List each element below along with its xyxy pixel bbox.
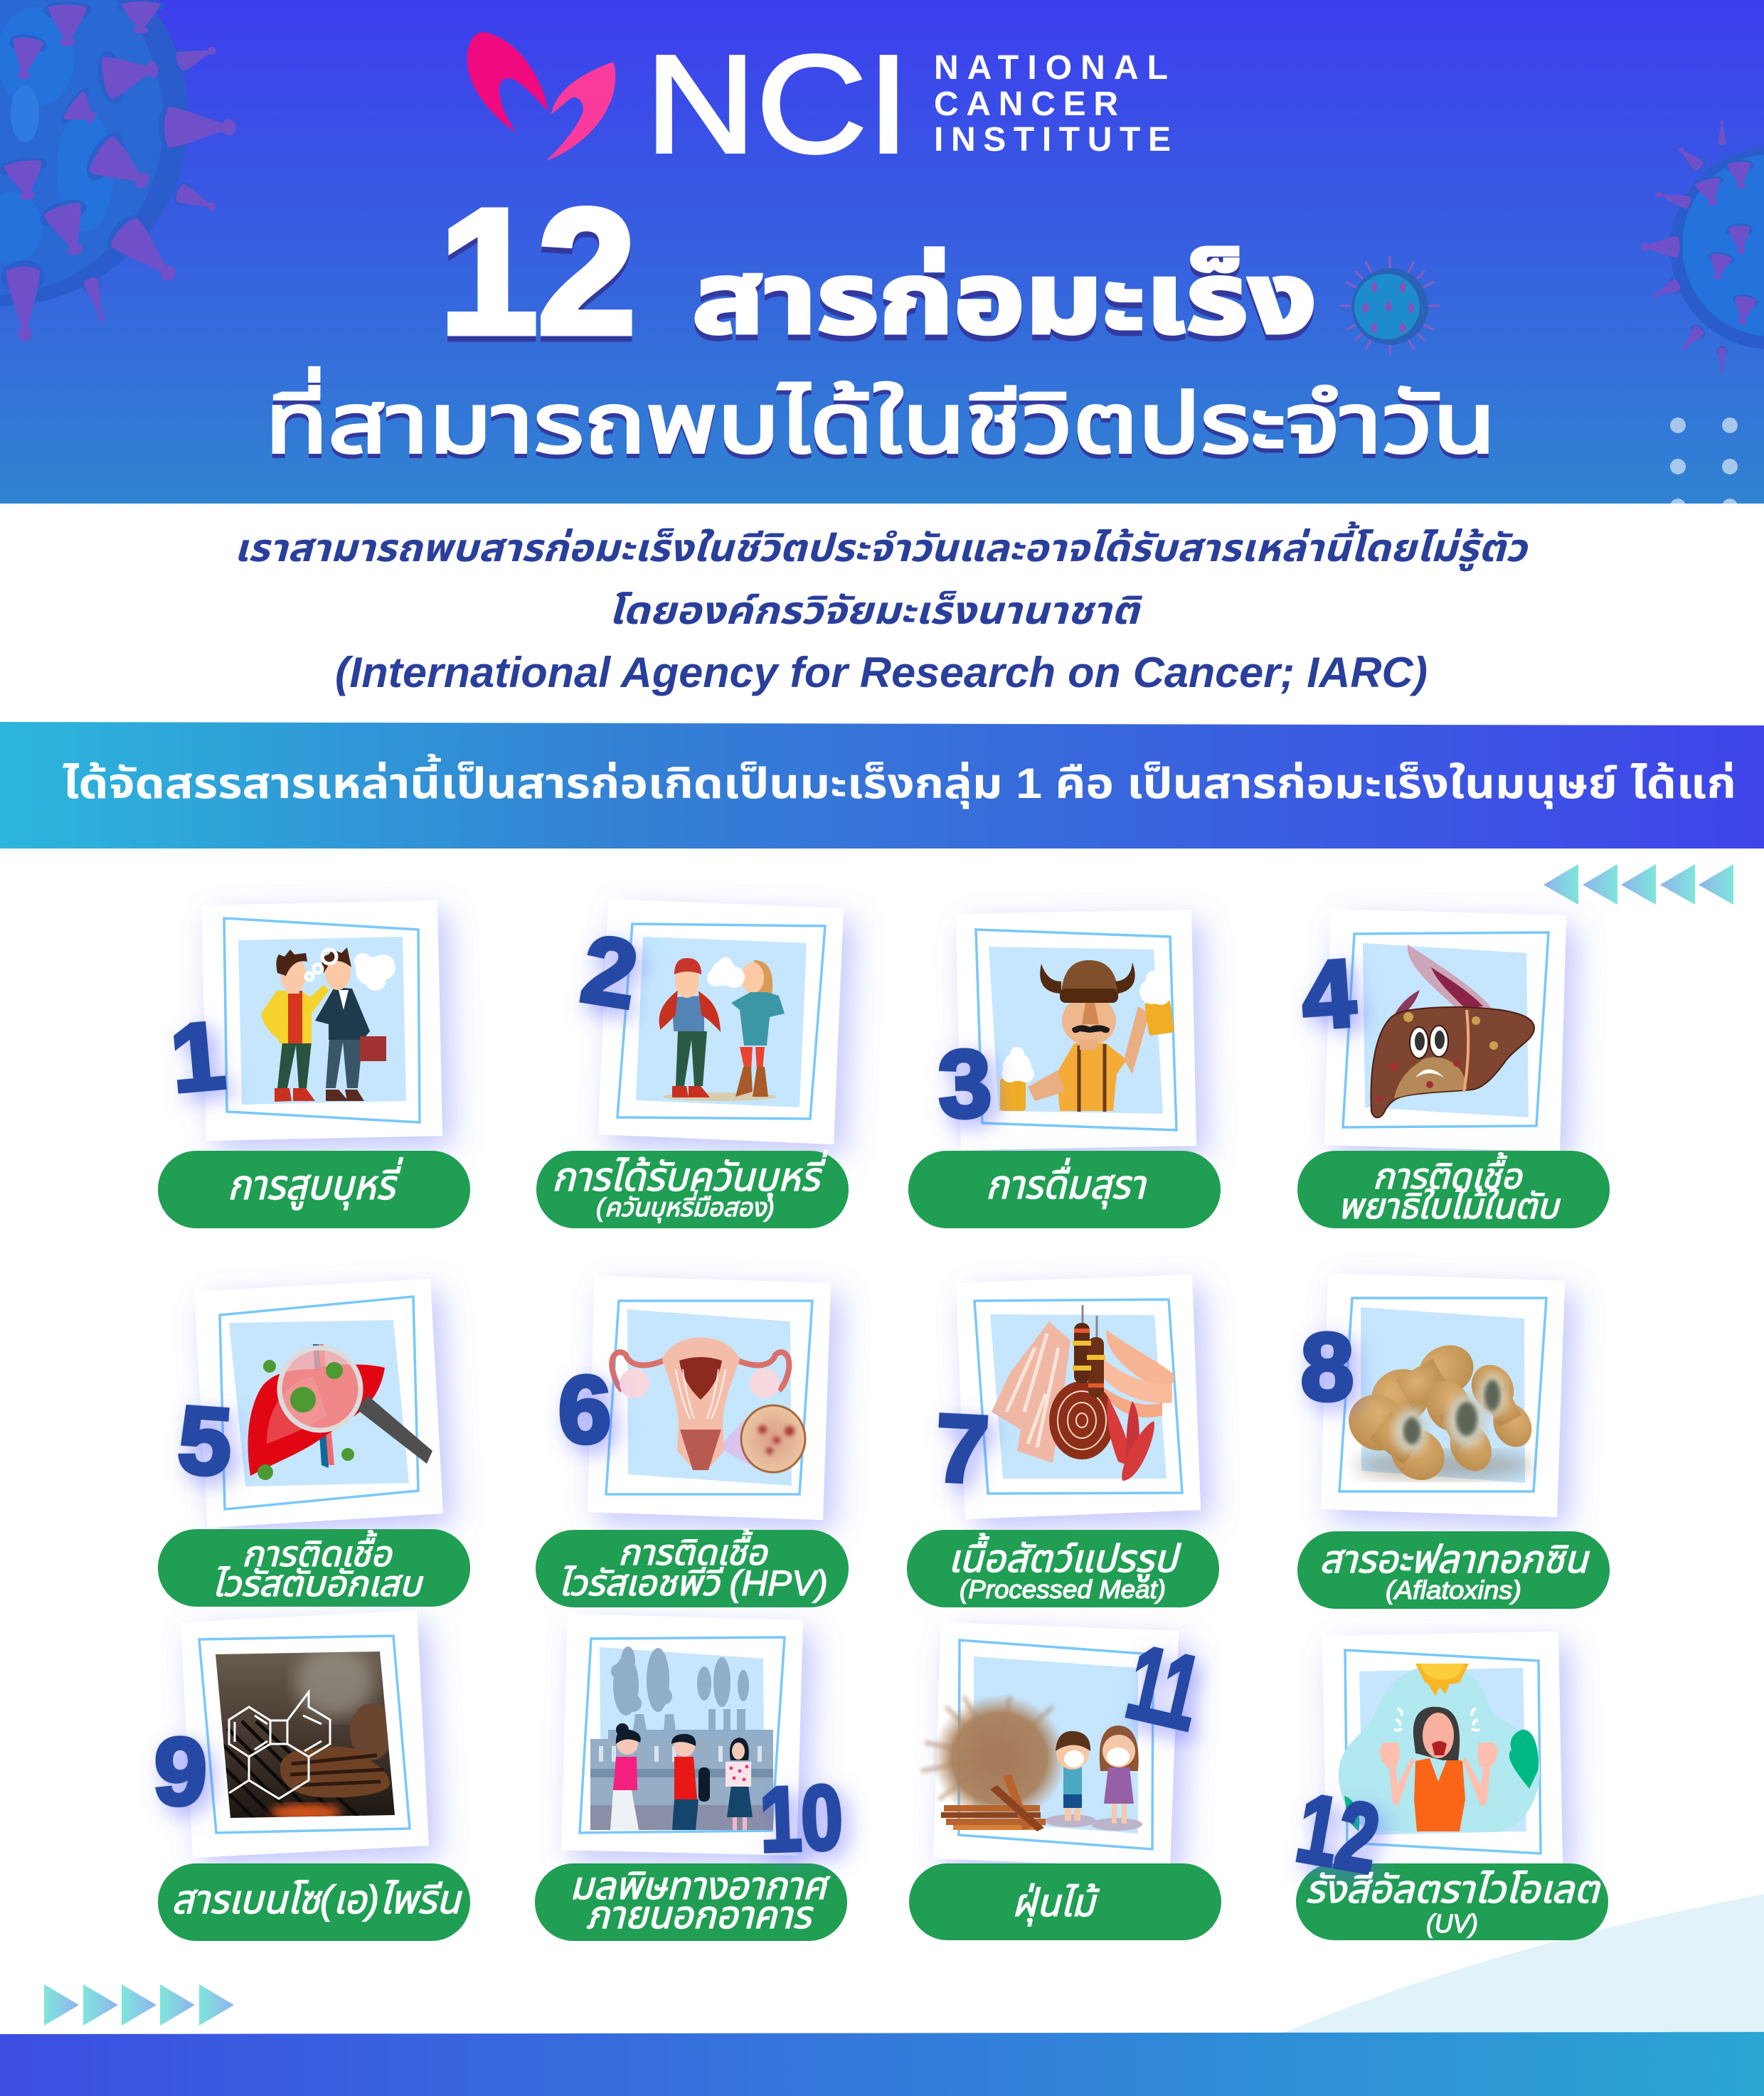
icon: wood dust and children with masks xyxy=(921,1694,1142,1831)
number 10: 10 xyxy=(758,1767,844,1871)
pill label 7: (Processed Meat) xyxy=(960,1575,1166,1604)
pill label 1: การสูบบุหรี่ xyxy=(228,1157,403,1211)
panel: item 4 liver fluke xyxy=(1297,909,1610,1228)
pill label 2: การได้รับควันบุหรี่ xyxy=(552,1150,828,1201)
pill label 12: (UV) xyxy=(1426,1909,1478,1938)
icon: left-pointing arrows xyxy=(1544,864,1733,905)
title: subtitle line: ที่สามารถพบได้ในชีวิตประจำวัน xyxy=(265,371,1496,475)
panel: item 9 benzo(a)pyrene xyxy=(152,1610,470,1941)
panel: item 5 hepatitis xyxy=(158,1279,470,1607)
pill label 4: พยาธิใบไม้ในตับ xyxy=(1338,1186,1561,1226)
bottom wedge xyxy=(1284,1894,1764,2033)
pill label 6: ไวรัสเอชพีวี (HPV) xyxy=(558,1563,828,1603)
logo text: National Cancer Institute: INSTITUTE xyxy=(934,121,1171,159)
pill label 4: การติดเชื้อ xyxy=(1373,1152,1523,1196)
number 12: 12 xyxy=(1290,1773,1387,1893)
number 8: 8 xyxy=(1301,1314,1354,1420)
card photo 1 xyxy=(202,900,442,1141)
icon: right-pointing arrows xyxy=(44,1984,234,2026)
logo text: National Cancer Institute xyxy=(934,49,1171,159)
pill label 10 xyxy=(535,1863,847,1941)
pill label 8: (Aflatoxins) xyxy=(1386,1575,1521,1605)
card photo 5 xyxy=(194,1279,443,1528)
number 2: 2 xyxy=(575,916,644,1028)
icon: butterfly logo xyxy=(467,32,615,161)
pill label 10: มลพิษทางอากาศ xyxy=(570,1865,830,1908)
icon: viking man with beer xyxy=(1000,960,1174,1112)
pill label 5: การติดเชื้อ xyxy=(242,1530,393,1574)
icon: two men smoking xyxy=(261,947,395,1102)
number 3: 3 xyxy=(937,1031,993,1138)
title: 12 สารก่อมะเร็ง xyxy=(440,172,1317,376)
panel: item 10 air pollution xyxy=(535,1614,847,1941)
banner text: ได้จัดสรรสารเหล่านี้เป็นสารก่อเกิดเป็นมะเร็งกลุ่ม 1 คือ เป็นสารก่อมะเร็งในมนุษย์ ได้แก่ xyxy=(63,753,1736,809)
bottom band xyxy=(0,2032,1764,2096)
pill label 4 xyxy=(1297,1151,1610,1228)
title: subtitle line: ที่สามารถพบได้ในชีวิตประจำวัน xyxy=(265,367,1496,471)
logo text: National Cancer Institute: CANCER xyxy=(934,85,1118,123)
icon: woman with sunburn xyxy=(1339,1664,1540,1831)
intro text block: โดยองค์กรวิจัยมะเร็งนานาชาติ xyxy=(608,590,1143,632)
card photo 2 xyxy=(598,899,844,1144)
intro text block: เราสามารถพบสารก่อมะเร็งในชีวิตประจำวันและอาจได้รับสารเหล่านี้โดยไม่รู้ตัว xyxy=(234,521,1529,572)
title: 12 สารก่อมะเร็ง: สารก่อมะเร็ง xyxy=(692,248,1317,360)
title: 12 สารก่อมะเร็ง: 12 xyxy=(440,172,636,371)
icon: small virus xyxy=(1340,256,1440,356)
icon: people in polluted city xyxy=(590,1647,773,1830)
panel: item 8 aflatoxins xyxy=(1297,1273,1610,1609)
panel: item 7 processed meat xyxy=(907,1275,1219,1607)
number 6: 6 xyxy=(558,1357,611,1463)
pill label 6 xyxy=(536,1528,849,1607)
number 4: 4 xyxy=(1298,940,1359,1050)
card photo 7 xyxy=(956,1275,1201,1519)
logo: NCI National Cancer Institute xyxy=(467,26,1171,182)
card photo 6 xyxy=(588,1276,831,1520)
number 7: 7 xyxy=(933,1395,991,1504)
logo wordmark NCI: NCI xyxy=(645,26,910,182)
panel: item 12 UV xyxy=(1290,1632,1608,1940)
number 5: 5 xyxy=(175,1387,235,1496)
icon: large virus left xyxy=(0,0,236,341)
number 1: 1 xyxy=(166,1002,229,1112)
pill label 6: การติดเชื้อ xyxy=(618,1528,768,1573)
pill label 11: ฝุ่นไม้ xyxy=(1012,1882,1100,1927)
card photo 4 xyxy=(1324,909,1566,1151)
card photo 10 xyxy=(561,1614,803,1856)
pill label 8 xyxy=(1297,1531,1610,1609)
pill label 1 xyxy=(158,1151,470,1228)
decorative dots xyxy=(1670,417,1738,514)
card photo 8 xyxy=(1321,1273,1565,1517)
banner ribbon xyxy=(0,722,1764,848)
panel: item 3 alcohol xyxy=(908,910,1221,1228)
panel: item 11 wood dust xyxy=(909,1622,1221,1940)
title: 12 สารก่อมะเร็ง: สารก่อมะเร็ง xyxy=(692,243,1317,354)
panel: item 1 smoking xyxy=(158,900,470,1228)
card photo 12 xyxy=(1322,1632,1563,1869)
card photo 9 xyxy=(181,1610,429,1858)
number 11: 11 xyxy=(1117,1624,1210,1752)
icon: sad liver with flukes xyxy=(1371,945,1534,1117)
intro text block: (International Agency for Research on Cancer; IARC) xyxy=(335,649,1428,696)
icon: large virus right xyxy=(1640,120,1764,373)
icon: processed meats xyxy=(992,1305,1174,1481)
logo text: National Cancer Institute: NATIONAL xyxy=(934,49,1168,87)
pill label 9 xyxy=(158,1863,470,1941)
icon: liver with magnifier xyxy=(248,1344,432,1480)
card photo 11 xyxy=(921,1622,1179,1868)
number 9: 9 xyxy=(152,1718,208,1826)
pill label 7 xyxy=(907,1530,1219,1607)
panel: item 2 secondhand smoke xyxy=(536,899,849,1228)
header background xyxy=(0,0,1764,504)
pill label 2 xyxy=(536,1150,849,1228)
panel: item 6 HPV xyxy=(536,1276,849,1607)
icon: grilled meat photo with molecule xyxy=(213,1647,398,1821)
intro text block xyxy=(234,521,1529,696)
pill label 11 xyxy=(909,1863,1221,1940)
pill label 12: รังสีอัลตราไวโอเลต xyxy=(1305,1868,1601,1911)
pill label 9: สารเบนโซ(เอ)ไพรีน xyxy=(171,1877,463,1922)
pill label 5: ไวรัสตับอักเสบ xyxy=(212,1564,424,1604)
title: 12 สารก่อมะเร็ง: 12 xyxy=(440,178,636,376)
icon: man and woman with cigarette smoke xyxy=(662,957,785,1101)
pill label 12 xyxy=(1290,1773,1608,1940)
pill label 5 xyxy=(158,1529,470,1607)
pill label 3: การดื่มสุรา xyxy=(986,1158,1147,1209)
card photo 3 xyxy=(956,910,1196,1150)
pill label 2: (ควันบุหรี่มือสอง) xyxy=(596,1190,775,1223)
icon: mouldy peanuts xyxy=(1337,1333,1541,1493)
pill label 10: ภายนอกอาคาร xyxy=(586,1894,814,1937)
pill label 7: เนื้อสัตว์แปรรูป xyxy=(948,1533,1181,1582)
pill label 3 xyxy=(908,1151,1221,1228)
pill label 8: สารอะฟลาทอกซิน xyxy=(1319,1538,1590,1581)
icon: uterus and HPV skin xyxy=(612,1337,805,1472)
